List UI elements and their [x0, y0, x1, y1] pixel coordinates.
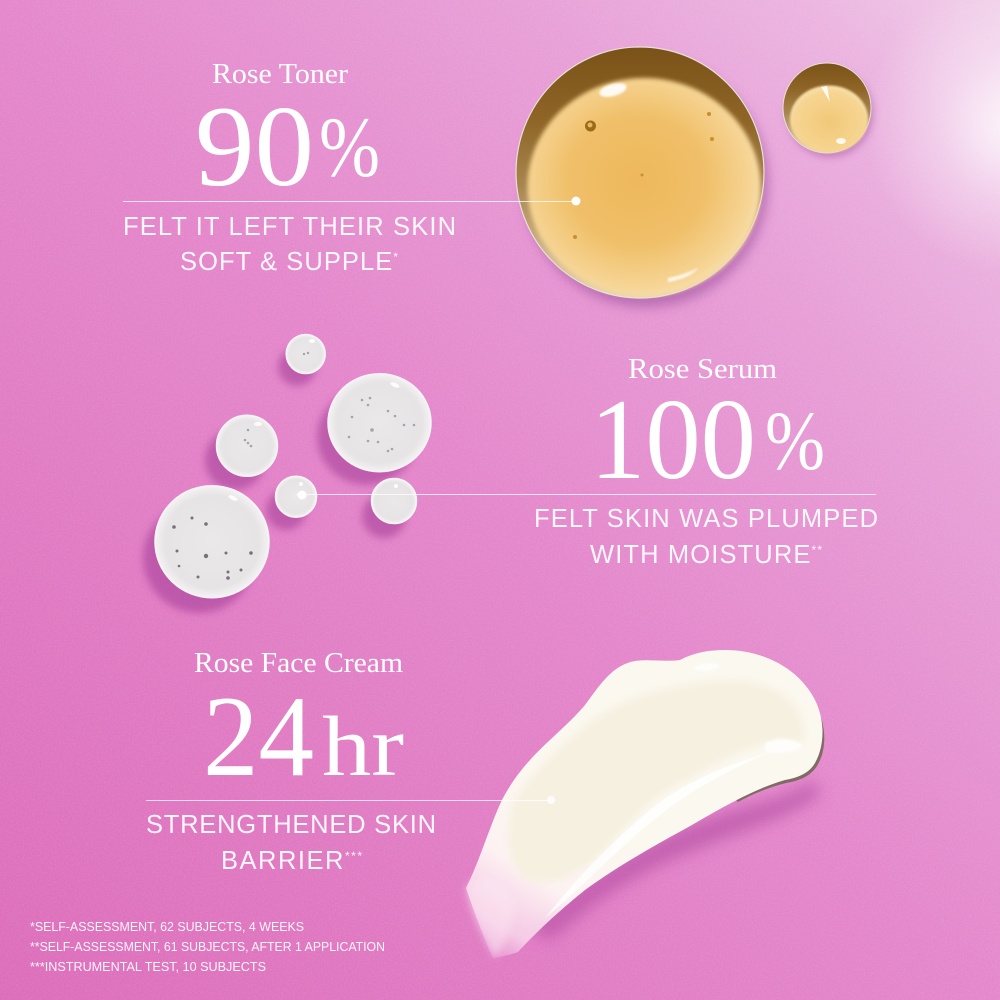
- droplet circles: [155, 334, 431, 598]
- cream stat: 24: [203, 673, 314, 801]
- toner stat: [195, 83, 380, 211]
- icon: cream swatch: [466, 650, 824, 958]
- cream description: [146, 811, 436, 875]
- toner description: [123, 213, 456, 276]
- footnotes: ***INSTRUMENTAL TEST, 10 SUBJECTS: [30, 959, 266, 974]
- text: rose serum: [296, 353, 878, 569]
- cream description: STRENGTHENED SKIN: [146, 811, 436, 839]
- serum description: FELT SKIN WAS PLUMPED: [534, 505, 878, 533]
- toner product name: Rose Toner: [212, 58, 348, 90]
- footnotes: **SELF-ASSESSMENT, 61 SUBJECTS, AFTER 1 APPLICATION: [30, 939, 385, 954]
- serum product name: Rose Serum: [628, 353, 777, 385]
- footnotes: *SELF-ASSESSMENT, 62 SUBJECTS, 4 WEEKS: [30, 919, 304, 934]
- toner description: FELT IT LEFT THEIR SKIN: [123, 213, 456, 241]
- droplet speckles: [172, 516, 253, 580]
- toner stat: %: [319, 99, 380, 195]
- toner leader line: [123, 196, 580, 206]
- serum description: [534, 505, 878, 569]
- droplet shadows: [143, 348, 417, 613]
- footnotes: [30, 919, 385, 974]
- cream product name: Rose Face Cream: [194, 647, 403, 679]
- serum description: WITH MOISTURE: [590, 541, 810, 569]
- serum stat: %: [765, 395, 825, 488]
- cream description: ***: [345, 849, 362, 863]
- text: rose face cream: [146, 647, 555, 875]
- icon: large oil droplet: [516, 47, 768, 307]
- text: rose toner: [123, 58, 580, 276]
- icon: serum droplets: [143, 334, 431, 613]
- toner stat: 90: [195, 83, 314, 211]
- cream description: BARRIER: [221, 847, 343, 875]
- cream stat: hr: [322, 698, 404, 794]
- serum stat: 100: [590, 376, 756, 504]
- cream inner scoop: [508, 680, 804, 883]
- droplet highlights: [228, 339, 400, 502]
- toner description: SOFT & SUPPLE: [180, 248, 392, 276]
- cream stat: [203, 673, 404, 801]
- cream leader line: [146, 796, 555, 804]
- icon: small oil droplet: [783, 63, 873, 157]
- toner description: *: [393, 250, 398, 264]
- serum leader line: [296, 490, 876, 500]
- serum description: **: [812, 543, 822, 557]
- cream body: [466, 650, 822, 958]
- cream highlights: [545, 662, 803, 918]
- cream soft fade: [466, 879, 515, 958]
- cream shadow: [530, 780, 820, 940]
- cream dark edge: [732, 703, 824, 802]
